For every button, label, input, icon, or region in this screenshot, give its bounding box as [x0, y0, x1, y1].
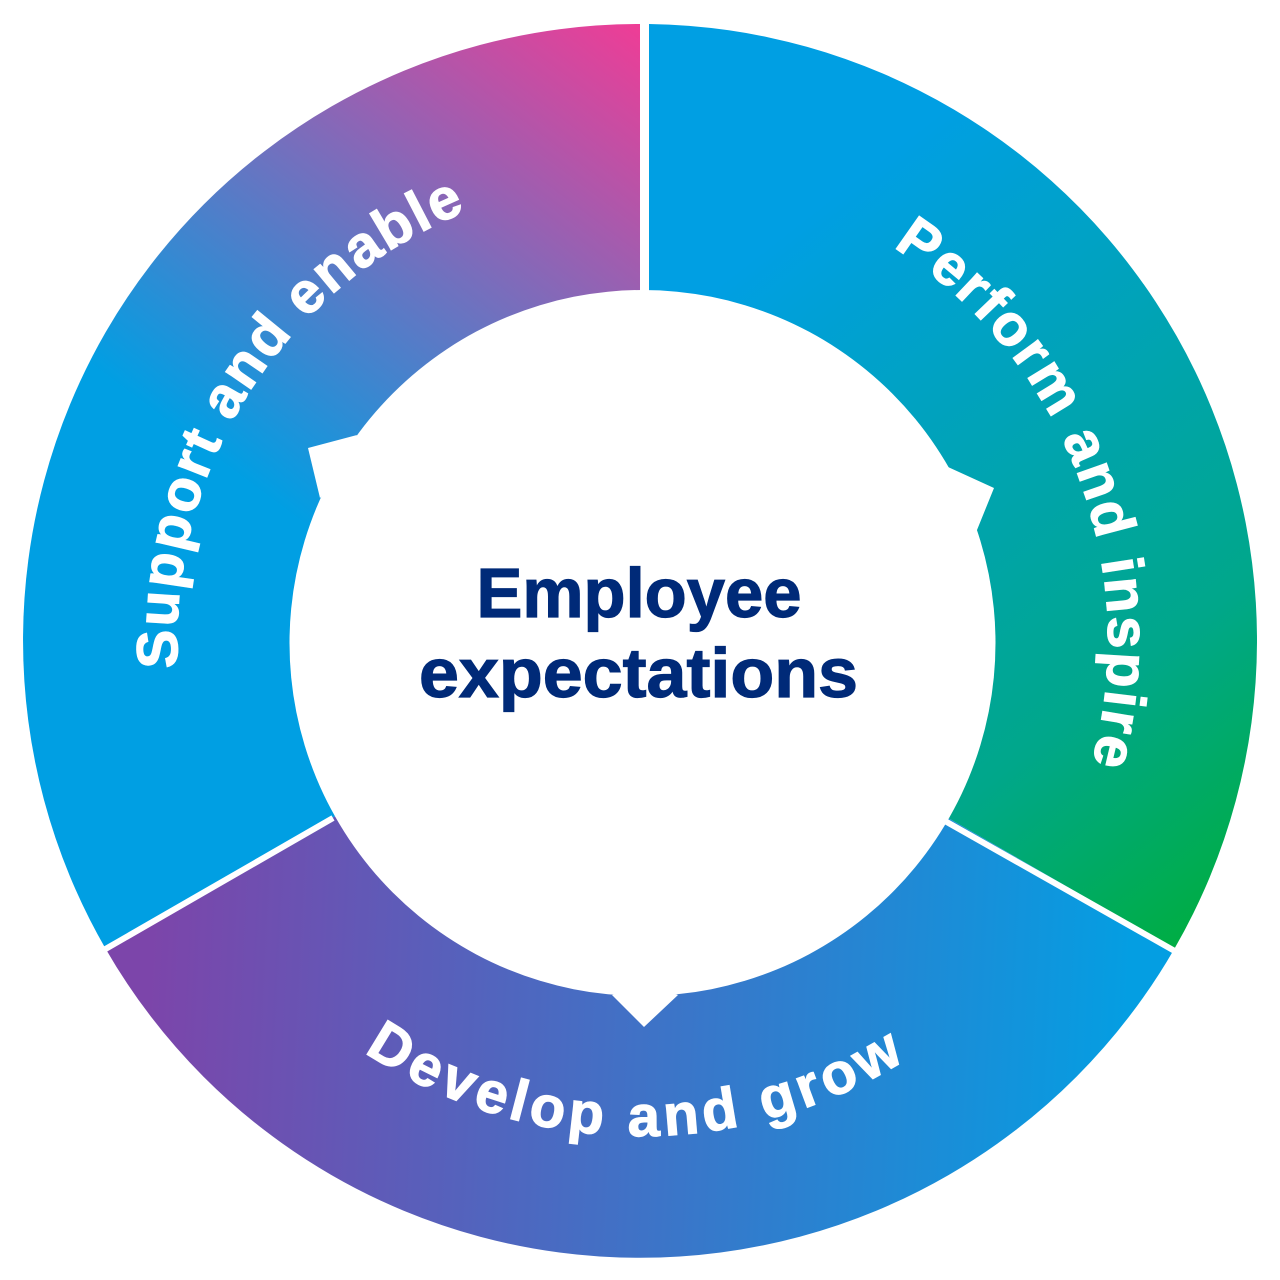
- centre title: Employee: [476, 554, 802, 632]
- label: Perform and inspire: Perform and inspire: [896, 215, 1148, 766]
- centre title: [419, 554, 858, 712]
- centre title: expectations: [419, 634, 858, 712]
- centre circle with pointer notches: [290, 290, 996, 1027]
- label: Support and enable: Support and enable: [136, 187, 461, 668]
- label: Develop and grow: Develop and grow: [366, 1020, 900, 1145]
